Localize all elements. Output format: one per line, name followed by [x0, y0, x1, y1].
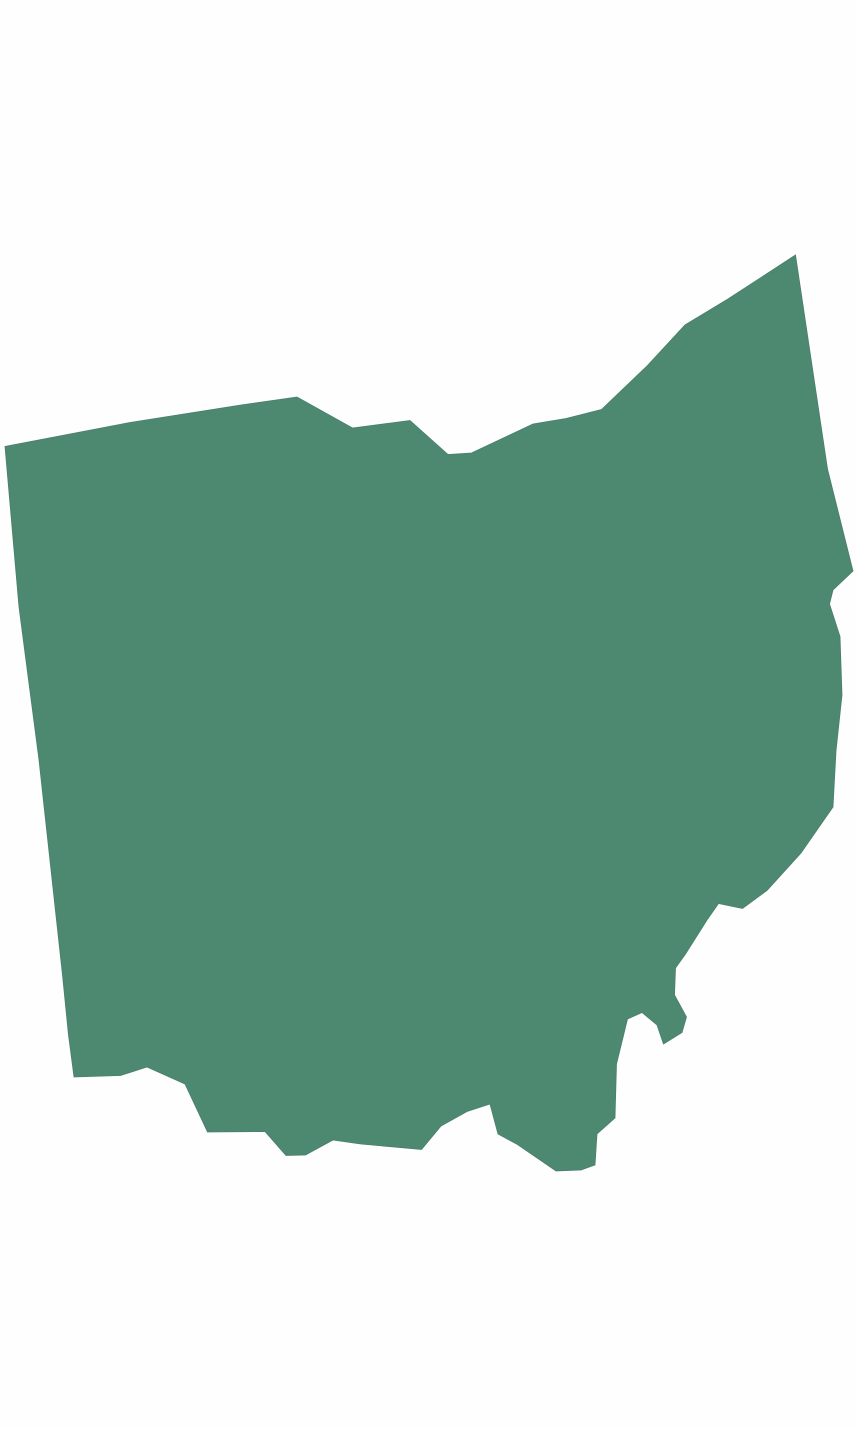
shape: Ohio outline — [5, 255, 853, 1171]
